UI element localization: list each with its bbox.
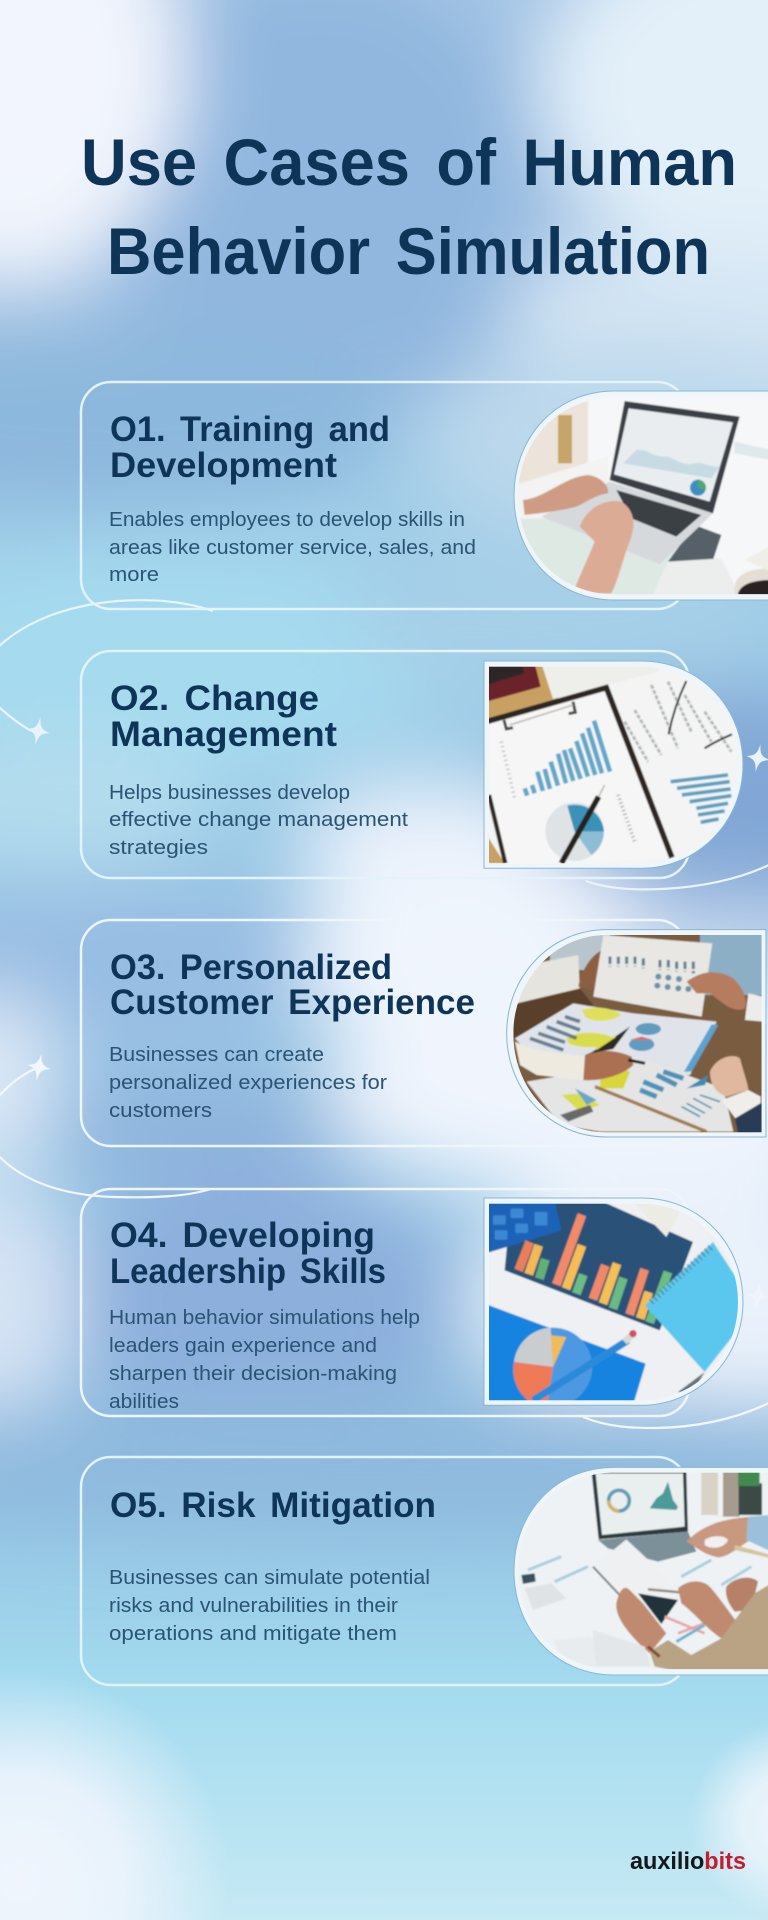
body text: more	[109, 564, 159, 586]
body text: Businesses can simulate potential	[109, 1567, 430, 1589]
card outline	[81, 1457, 687, 1685]
title	[81, 125, 737, 288]
heading	[110, 948, 475, 1022]
photo: colleagues with tablet and laptop	[508, 1460, 768, 1687]
card outline	[81, 651, 689, 878]
body text	[109, 1307, 420, 1413]
decorative curve and star, left lower	[0, 1051, 211, 1197]
body text: Human behavior simulations help	[109, 1307, 420, 1329]
card outline	[81, 1189, 689, 1416]
title: Use Cases of Human	[81, 125, 737, 199]
heading: Leadership Skills	[110, 1252, 386, 1291]
photo: clipboard with charts	[478, 655, 743, 868]
body text: leaders gain experience and	[109, 1335, 377, 1357]
title: Behavior Simulation	[107, 214, 710, 288]
body text: abilities	[109, 1391, 179, 1413]
body text: effective change management	[109, 809, 408, 831]
decorative curve and star, top left	[0, 600, 213, 747]
panel: 03 personalized customer experience	[81, 920, 766, 1146]
body text: risks and vulnerabilities in their	[109, 1595, 398, 1617]
card outline	[81, 382, 687, 609]
body text	[109, 1567, 430, 1645]
photo: team reviewing printed charts	[500, 925, 766, 1138]
body text: operations and mitigate them	[109, 1623, 397, 1645]
body text: Enables employees to develop skills in	[109, 509, 465, 531]
heading: Customer Experience	[110, 983, 475, 1022]
heading	[110, 1216, 386, 1291]
card outline	[81, 920, 687, 1146]
heading	[110, 679, 337, 754]
body text: customers	[109, 1100, 212, 1122]
decorative curve and star, right lower	[583, 1280, 768, 1428]
body text: areas like customer service, sales, and	[109, 537, 476, 559]
body text: Businesses can create	[109, 1044, 324, 1066]
body text: personalized experiences for	[109, 1072, 387, 1094]
body text	[109, 1044, 387, 1122]
panel: 01 training and development	[81, 382, 768, 612]
photo: laptop with hands	[508, 385, 768, 612]
heading: O1. Training and	[110, 410, 390, 449]
body text: sharpen their decision-making	[109, 1363, 397, 1385]
body text: Helps businesses develop	[109, 782, 350, 804]
heading: Development	[110, 446, 337, 485]
heading	[110, 410, 390, 485]
body text: strategies	[109, 837, 208, 859]
body text	[109, 782, 408, 859]
logo: auxiliobits: auxiliobits	[630, 1848, 746, 1875]
decorative curve and star, right upper	[586, 742, 768, 889]
panel: 04 developing leadership skills	[81, 1189, 743, 1416]
heading: O3. Personalized	[110, 948, 392, 987]
heading: O5. Risk Mitigation	[110, 1486, 436, 1525]
body text	[109, 509, 476, 586]
heading: O2. Change	[110, 679, 319, 718]
heading: O4. Developing	[110, 1216, 375, 1255]
panel: 05 risk mitigation	[81, 1457, 768, 1687]
photo: colourful bar chart and notebook	[478, 1192, 743, 1406]
panel: 02 change management	[81, 651, 743, 878]
heading: Management	[110, 715, 337, 754]
